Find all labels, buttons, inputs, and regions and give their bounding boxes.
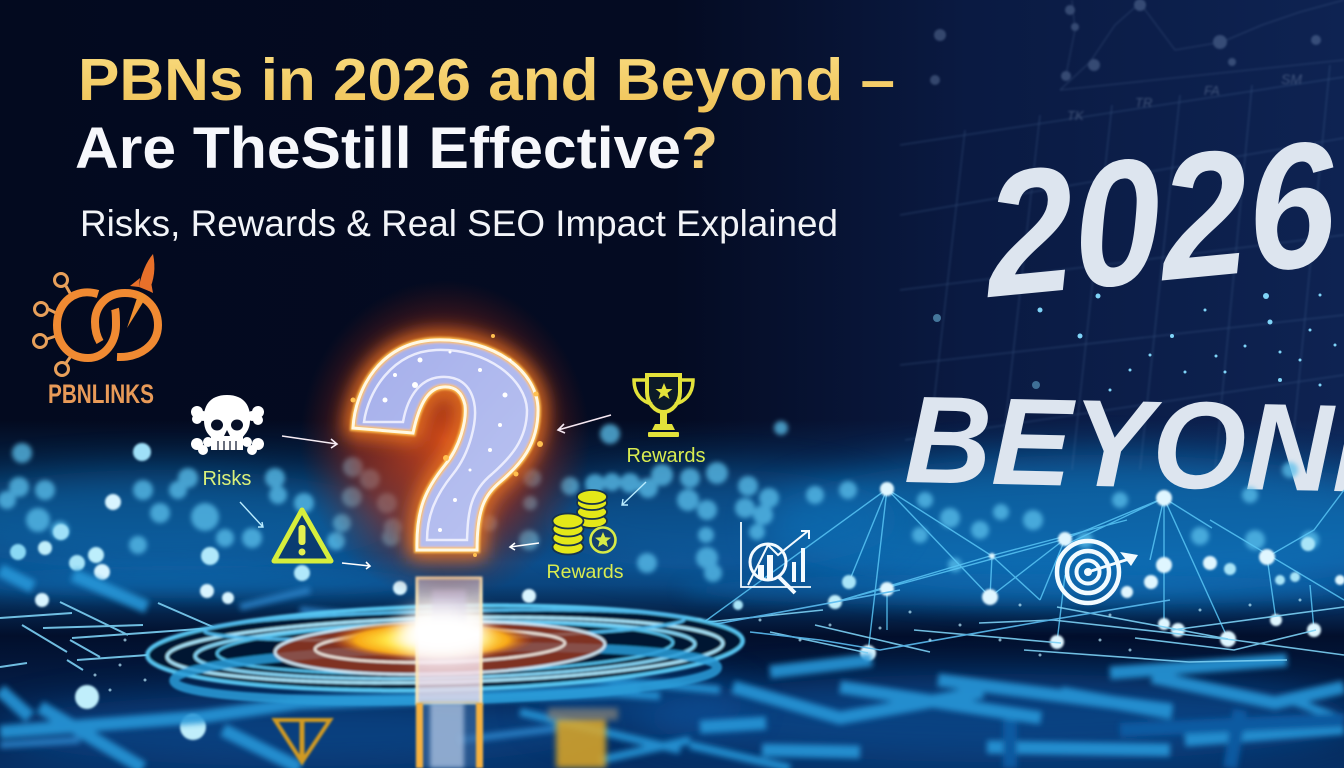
bokeh light particles <box>0 421 1319 582</box>
arrow: risks to warning <box>240 502 263 527</box>
icon: target with arrow <box>1057 541 1138 603</box>
bright network nodes, left <box>10 443 536 740</box>
subtitle: Risks, Rewards & Real SEO Impact Explained <box>80 203 838 244</box>
background chart grid, upper right: TK <box>1067 108 1085 123</box>
title line 2: Are TheStill Effective ? <box>75 116 718 181</box>
label: Rewards bottom: Rewards <box>547 561 624 583</box>
background chart grid, upper right: TR <box>1135 95 1152 110</box>
arrow: trophy to question mark <box>558 415 611 433</box>
floor sparkle dots <box>94 598 1302 692</box>
arrow: coins to question mark <box>510 543 539 550</box>
circuit floor, sharp layer <box>0 590 1344 670</box>
logo: PBNLINKS <box>34 254 158 409</box>
background chart grid, upper right <box>900 0 1344 480</box>
logo linked rings <box>57 292 158 358</box>
icon: coin stacks <box>552 490 616 554</box>
arrow: skull to question mark <box>282 436 337 448</box>
background chart grid, upper right: FA <box>1204 83 1220 98</box>
logo node circles <box>34 274 71 376</box>
icon: warning triangle <box>274 510 331 561</box>
title line 1: PBNs in 2026 and Beyond – <box>78 47 895 113</box>
circuit floor, blurred foreground layer <box>0 570 1344 768</box>
icon: analytics chart <box>741 522 811 593</box>
question mark stem with reflection <box>396 578 488 768</box>
glowing question mark <box>300 280 590 600</box>
label: Rewards top: Rewards <box>627 445 705 467</box>
logo rocket <box>127 254 154 328</box>
starfield dots <box>933 293 1336 392</box>
background chart grid, upper right: SM <box>1281 71 1302 87</box>
glowing core at base of question mark <box>330 620 534 660</box>
arrow: warning to stem <box>342 562 370 569</box>
logo wordmark: PBNLINKS <box>48 379 154 409</box>
reflected warning and coins in floor <box>275 708 618 768</box>
arrow: rewards to coins <box>622 482 646 505</box>
label: Risks: Risks <box>203 468 251 490</box>
network nodes, right <box>693 482 1344 661</box>
icon: trophy <box>634 375 693 437</box>
icon: skull and crossbones <box>191 395 264 455</box>
title <box>75 47 895 181</box>
concentric energy rings <box>146 599 744 707</box>
network lines, right <box>700 489 1344 653</box>
